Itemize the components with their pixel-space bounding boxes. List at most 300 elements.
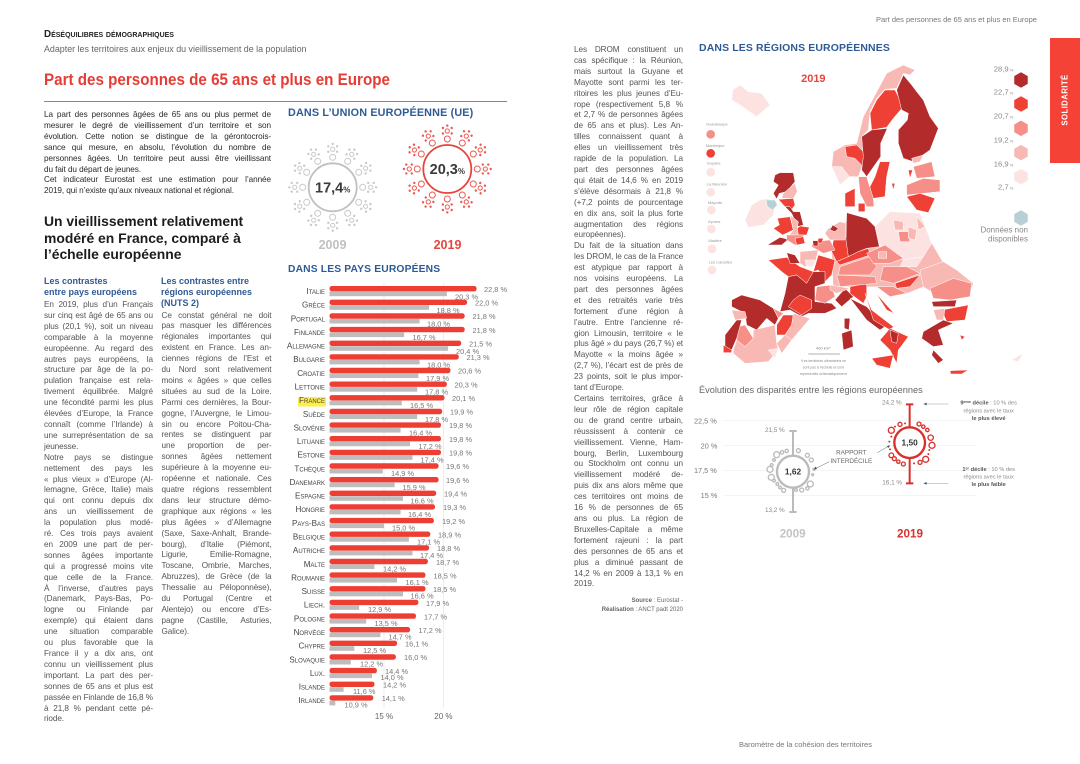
text column 1: ré. Ces trois pays avaient [44,529,153,538]
text column 1: la population plus modé- [44,518,153,527]
year 2009: 2009 [319,238,346,252]
text column 1: logne ou Finlande par [44,605,153,614]
bar chart: pays européens: Roumanie [291,573,325,582]
bar chart: pays européens: Finlande [294,328,325,337]
text column 2: moins « âgées » que celles [162,376,272,385]
text column 1: comparable à la moyenne [44,333,153,342]
bar chart: pays européens: 17,4 % [420,456,444,464]
map legend: 20,7 % [994,111,1014,120]
bar chart: pays européens: 19,9 % [450,408,473,416]
bar chart: pays européens: 19,8 % [449,448,472,458]
bar chart: pays européens: 16,5 % [410,401,433,410]
text column 1: « plus vieux » d’Europe (Al- [44,474,153,484]
text column 3: tilles connaissent quant à [574,132,683,141]
text column 3: fortement d’une région à [574,307,683,316]
intro text: du fait du départ de jeunes. [44,165,141,174]
intro text [44,110,271,195]
bar chart: pays européens: 16,1 % [406,578,429,587]
text column 3: Certains territoires, grâce à [574,394,683,403]
bar chart: pays européens: 18,8 % [436,306,460,315]
EU radial 2009 [288,143,377,232]
finland [897,75,938,163]
year labels: 2019 [897,527,923,540]
bar chart: pays européens: Suède [303,410,325,419]
text column 1: nettement des pays les [44,464,153,473]
bar chart: pays européens: Pologne [294,614,325,623]
bar chart: pays européens: 19,3 % [443,503,466,512]
united kingdom [767,173,809,245]
text column 3: nos voisins européens. La [574,274,683,283]
text column 1: lemagne, Grèce, Italie) mais [44,485,153,494]
tab: solidarité [1050,38,1080,163]
value labels [765,400,902,514]
text column 3: vieillissement modéré de- [574,470,683,479]
text column 2: rentes se distinguent par [162,430,272,439]
EU radial 2009: 17,4% [315,180,350,196]
bar chart: pays européens: Islande [299,683,325,692]
text column 2: pagne (Castille, Asturies, [162,616,272,625]
text column 1: qui a progressé moins vite [44,562,153,571]
bar chart: pays européens: Slovaquie [289,655,325,664]
bar chart: pays européens: Espagne [295,492,325,501]
intro text: Cet indicateur Eurostat est une estimation pour l’année [44,175,271,184]
overseas territories: Martinique [706,143,725,148]
bar chart: pays européens: Danemark [289,478,325,487]
source [602,598,683,613]
heading: pays européens: DANS LES PAYS EUROPÉENS [288,264,440,275]
source: Source : Eurostat - [632,598,683,604]
subheading column 2: régions européennes [161,287,252,297]
text column 2: Alentejo) ou encore d’Es- [162,605,272,614]
bar chart: pays européens: Portugal [291,314,326,323]
overseas territories: Guyane [707,160,721,165]
intro text: La part des personnes âgées de 65 ans ou plus permet de [44,110,271,119]
bar chart: pays européens: 17,2 % [418,442,442,451]
text column 1: que celle de la France. [44,573,153,582]
text column 3: Du fait de la situation dans [574,241,683,250]
chart title: Évolution des disparités entre les régions européennes [699,385,923,395]
text column 3: puis dix ans alors même que [574,481,683,490]
overseas territories: Mayotte [708,200,723,205]
text column 2: bourg), d’Italie (Piémont, [162,540,272,549]
text column 2: plus âgées » d’Allemagne [162,518,272,527]
text column 2: dans leur structure démo- [162,496,272,505]
text column 3: vieillissement. Vienne, Ham- [574,438,683,447]
bar chart: pays européens: 12,9 % [368,605,391,614]
map legend: Données non [980,226,1028,235]
bar chart: pays européens: 15 % [375,712,393,721]
text column 3: qui était de 14,6 % en 2019 [574,176,683,185]
northern ireland: no data [766,200,777,210]
text column 1: une surreprésentation de sa [44,431,153,440]
iceland [732,85,770,117]
text column 3: mais surtout la Guyane et [574,67,683,76]
subheading column 1: Les contrastes [44,276,108,286]
ireland [745,198,775,227]
map legend: 22,7 % [994,87,1014,96]
callout: rapport interdécile [814,445,890,469]
scale: *Les territoires ultramarins ne [801,359,846,363]
scale: représentés schématiquement [800,372,847,376]
text column 1: riode. [44,714,64,723]
scale: sont pas à l’échelle et sont [803,366,844,370]
text column 3: rapide de la population. La [574,154,683,163]
text column 1: À l’inverse, d’autres pays [44,584,153,593]
scale [800,346,847,376]
greece [922,320,968,374]
callout: rapport interdécile: INTERDÉCILE [830,456,872,465]
subheading column 1: entre pays européens [44,287,137,297]
grid and axis: 20 % [701,441,718,450]
overseas territories: Les Canaries [709,259,732,264]
bar chart: pays européens [287,283,507,721]
bar chart: pays européens: 17,2 % [418,626,442,635]
text column 2: graphique aux régions « les [162,507,272,516]
text column 3: ans ou plus. La région de [574,514,683,523]
text column 2: Thessalie au Péloponnèse), [162,583,272,592]
text column 3: s’élève désormais à 21,8 % [574,187,683,196]
text column 1 [44,300,154,723]
text column 3: 16 % de personnes de 65 [574,503,683,512]
text column 3: (+7,2 points de pourcentage [574,198,683,207]
bar chart: pays européens: 21,5 % [469,340,492,348]
bar chart: pays européens: Hongrie [295,505,325,514]
bar chart: pays européens: Slovénie [294,423,325,432]
text column 1: important. La part des per- [44,671,153,680]
text column 3: ritoires les plus jeunes d’Eu- [574,89,683,98]
text column 2: quatre régions ressemblent [162,485,272,494]
bar chart: pays européens: 11,6 % [353,687,376,696]
text column 1: une situation comparable [44,627,153,636]
text column 1: ans un vieillissement de [44,507,153,516]
bar chart: pays européens: 18,5 % [433,585,456,594]
heading: un vieillissement: l’échelle européenne [44,246,181,262]
text column 2: sin ou encore Poitou-Cha- [162,420,272,429]
bar chart: pays européens: 21,8 % [472,312,496,321]
map legend: 28,9 % [994,65,1014,74]
text column 3: rope (respectivement 5,8 % [574,100,683,109]
bar chart: pays européens: 15,0 % [392,524,415,532]
text column 3: ou de grand centre urbain, [574,416,683,425]
text column 3: tant d’Europe. [574,383,624,392]
bar chart: pays européens: 16,0 % [404,653,427,662]
year labels: 2009 [780,527,806,540]
bar chart: pays européens: 14,1 % [382,694,405,703]
bar chart: pays européens: Malte [304,560,325,569]
cyprus [1012,353,1023,362]
norway [832,65,915,185]
bar chart: pays européens: Bulgarie [293,355,325,364]
bar chart: pays européens: Lettonie [295,382,325,392]
map legend: 16,9 % [994,160,1014,169]
value labels: 24,2 % [882,400,902,407]
bar chart: pays européens: 17,9 % [426,599,449,608]
bar chart: pays européens: Autriche [293,546,325,555]
callout: 9e décile [923,401,1017,422]
heading: un vieillissement [44,213,243,262]
bar chart: pays européens: 16,7 % [412,333,436,342]
text column 3: bourg, Berlin, Luxembourg [574,449,683,458]
subheading column 2: (NUTS 2) [161,298,199,308]
bar chart: pays européens: 20,3 % [454,380,478,390]
text column 1: sonnes de 65 ans et plus est [44,682,153,691]
text column 1: En 2019, plus d’un Français [44,300,153,309]
text column 1: (Danemark, Pays-Bas, Po- [44,594,153,603]
running header: Part des personnes de 65 ans et plus en Europe [876,15,1037,24]
intro text: 2019, qui n’existe qu’aux niveaux national et régional. [44,186,234,195]
bar chart: pays européens: 13,5 % [374,619,398,628]
year 2019: 2019 [434,238,461,252]
intro text: mesurer le degré de vieillissement d’un territoire et son [44,121,271,130]
bar chart: pays européens: 16,4 % [409,428,432,438]
text column 2: sonnes âgées nettement [162,452,272,461]
callout: 1er décile: 1ᵉʳ décile : 10 % des [962,466,1015,473]
text column 2 [162,310,272,636]
text column 3: plus a diminué passant de [574,558,683,567]
text column 2: ciennes régions de l’Est et [162,354,272,363]
text column 1: jeunesse. [44,442,78,451]
bar chart: pays européens: 18,7 % [436,558,459,567]
text column 3: réussissent à contenir ce [574,427,683,436]
text column 3: Bruxelles-Capitale a même [574,525,683,534]
bar chart: pays européens: Lituanie [297,437,325,446]
text column 2: pas masquer les différences [162,321,272,330]
callout: 1er décile: régions avec le taux [964,474,1014,480]
bar chart: pays européens: Estonie [297,451,325,460]
text column 2: Ce constat général ne doit [162,310,272,320]
scale: 400 km* [816,346,831,351]
bar chart: pays européens: 20,3 % [455,292,478,302]
text column 3: de 65 ans et plus). Les An- [574,121,683,130]
overseas territories: Madère [708,238,723,243]
EU radial 2019 [403,124,492,214]
bar chart: pays européens: 12,2 % [360,660,383,668]
text column 3: plus âgé » du pays (26,7 %) et [574,339,683,348]
central europe [830,245,923,313]
subheading column 2: Les contrastes entre [161,276,249,286]
grid and axis: 15 % [701,491,718,500]
bar chart: pays européens: Italie [307,287,325,296]
central europe base [832,243,943,293]
bar chart: pays européens: Tchèque [294,464,325,473]
baltic states [892,162,940,213]
bar chart: pays européens: Norvège [294,628,325,637]
intro text: sance qui mesure, en absolu, l’évolution du nombre de [44,143,271,152]
bar chart: pays européens: 16,1 % [405,640,428,648]
text column 1: ou plus favorable que la [44,638,153,647]
bar chart: pays européens: 10,9 % [344,700,368,710]
text column 3: en dix ans, soit la plus forte [574,209,683,218]
text column 2: une proportion de per- [162,441,272,450]
iberian peninsula [723,295,810,363]
benelux [812,222,846,253]
callout: rapport interdécile: RAPPORT [836,449,867,456]
range 2009: 1,62 [785,467,801,477]
text column 2: Galice). [162,627,189,636]
bar chart: pays européens: 22,8 % [484,285,507,294]
bar chart: pays européens: Allemagne [287,342,325,351]
value labels: 13,2 % [765,507,785,514]
text column 3: fortement rajeuni : la part [574,536,683,545]
text column 3: part des personnes âgées [574,285,683,294]
text column 3: Les DROM constituent un [574,45,683,54]
text column 2: du Nord sont relativement [162,365,272,374]
bar chart: pays européens: 20 % [434,712,453,721]
bar chart: pays européens: 20,1 % [452,394,475,403]
bar chart: pays européens: 22,0 % [475,298,498,308]
text column 2: situées au sud de la Loire. [162,387,272,396]
text column 3: 2019. [574,579,594,588]
range 2009 [767,431,815,512]
text column 2: supérieure à la moyenne eu- [162,463,272,472]
bar chart: pays européens: 19,6 % [446,476,469,485]
bar chart: pays européens: 18,5 % [434,572,457,580]
bar chart: pays européens: 14,4 % [385,667,408,676]
text column 1: élevées d’Europe, la France [44,409,153,418]
heading: un vieillissement: Un vieillissement relativement [44,213,243,229]
intro text: personnes âgées. Un territoire peut aussi être vieillissant [44,154,271,163]
year labels [780,527,923,540]
tab: solidarité: SOLIDARITÉ [1060,74,1070,126]
text column 1: autres pays européens, la [44,355,153,364]
text column 1: plus (20,1 %), soit un niveau [44,322,153,331]
overseas territories: La Réunion [707,181,727,186]
bar chart: pays européens: 19,4 % [444,490,467,498]
text column 1: en 2009 une part de per- [44,540,153,549]
bar chart: pays européens: 19,8 % [449,421,472,430]
bar chart: pays européens: 18,0 % [427,320,450,328]
text column 1: France il y a dix ans, ont [44,649,153,658]
text column 3: leur rôle de région capitale [574,405,683,414]
sweden [858,90,903,207]
poland [875,212,932,260]
callout: 1er décile: le plus faible [972,482,1006,488]
bar chart: pays européens: 14,0 % [380,673,404,682]
text column 1: sonnes âgées importante [44,551,153,560]
bar chart: pays européens: Suisse [302,587,325,596]
overseas territories [706,122,745,274]
value labels: 16,1 % [882,480,902,487]
bar chart: pays européens: Belgique [293,532,325,542]
bar chart: pays européens: 21,8 % [472,326,496,335]
subheading column 2 [161,276,252,308]
text column 2: Abruzzes), de Grèce (de la [162,572,272,581]
bar chart: pays européens: 19,2 % [442,517,465,526]
text column 1: qui ont connu depuis dix [44,496,153,505]
bar chart: pays européens: Pays-Bas [292,519,325,528]
value labels: 21,5 % [765,427,785,434]
bar chart: pays européens: 16,6 % [410,496,434,506]
text column 3: 14,2 % en 2009 à 13,1 % en [574,568,683,578]
text column 2: régionales importantes qui [162,332,272,341]
bar chart: pays européens: 16,4 % [408,510,431,519]
text column 3: 23 points, soit le plus impor- [574,372,683,381]
text column 2: Parmi ces dernières, la Bour- [162,398,272,407]
callout: 9e décile: le plus élevé [972,416,1005,422]
france [768,250,837,317]
text column 2: Ligurie, Emilie-Romagne, [162,550,272,559]
text column 3: Mayotte sont parmi les ter- [574,78,683,87]
map legend [980,65,1028,244]
text column 3: elles un vieillissement très [574,143,683,152]
bar chart: pays européens: 17,7 % [424,612,447,622]
bar chart: pays européens: Chypre [298,642,325,651]
bar chart: pays européens: 14,9 % [391,469,414,478]
bar chart: pays européens: 20,6 % [458,366,481,376]
text column 3 [574,45,684,588]
text column 1: une fécondité parmi les plus [44,398,153,407]
overseas territories: Guadeloupe [706,122,728,127]
text column 2: du Portugal (Centre et [162,594,272,603]
bar chart: pays européens: Croatie [297,369,325,378]
bar chart: pays européens: 19,8 % [449,435,472,444]
text column 2: gogne, l’Auvergne, le Limou- [162,409,272,418]
range 2019 [888,404,935,483]
text column 1: à 21,8 % pendant cette pé- [44,704,153,713]
text column 3: et des retraités varie très [574,296,683,305]
text column 3: part des personnes âgées [574,165,683,174]
text column 1: tivement équilibrée. Malgré [44,387,153,396]
bar chart: pays européens: 16,6 % [410,592,434,600]
italy [835,283,908,368]
text column 3: Mayotte « la moins âgée » [574,350,683,359]
bar chart: pays européens: 17,9 % [426,374,449,383]
bar chart: pays européens: 20,4 % [456,347,479,356]
heading: un vieillissement: modéré en France, comparé à [44,230,241,246]
bar chart: pays européens: 17,4 % [420,551,443,560]
grid and axis [694,416,977,500]
text column 2: (Saxe, Saxe-Anhalt, Brande- [162,529,272,538]
heading: régions européennes: DANS LES RÉGIONS EUROPÉENNES [699,43,890,54]
grid and axis: 22,5 % [694,416,717,425]
map year: 2019 [801,73,826,85]
text column 3: cas spécifique : la Réunion, [574,56,683,65]
text column 2: Toscane, Ombrie, Marches, [162,561,272,570]
text column 1: passée en Finlande de 16,8 % [44,693,153,702]
map: régions européennes [706,65,1028,376]
heading: union européenne: DANS L’UNION EUROPÉENNE (UE) [288,107,473,119]
romania and bulgaria [920,262,973,322]
bar chart: pays européens: 14,2 % [383,680,406,690]
bar chart: pays européens: 12,5 % [363,646,386,655]
section label: Déséquilibres démographiques [44,29,174,40]
text column 3: (2,7 %), l’écart est de près de [574,361,683,370]
map legend: disponibles [988,235,1028,244]
text column 3: l’autre. Entre l’ancienne ré- [574,318,683,327]
text column 1: structure par âge de la po- [44,365,153,374]
text column 3: les DROM, le cas de la France [574,252,683,261]
bar chart: pays européens: Grèce [302,301,325,310]
subheading column 1 [44,276,137,297]
bar chart: pays européens: 15,9 % [402,483,426,492]
range 2019: 1,50 [902,438,918,448]
bar chart: pays européens: 21,3 % [466,353,490,362]
text column 3: est atypique par rapport à [574,263,683,272]
bar chart: pays européens: Liech. [304,601,325,610]
title: Part des personnes de 65 ans et plus en Europe [44,70,390,89]
text column 3: ou Stockholm ont connu un [574,459,683,468]
text column 3: européennes). [574,230,626,239]
text column 1: sur cinq est âgé de 65 ans ou [44,311,153,320]
bar chart: pays européens: 17,1 % [417,538,440,546]
text column 2: ropéenne et nationale. Ces [162,474,272,483]
text column 1: connu un vieillissement plus [44,660,153,669]
text column 1: exemple) qui étaient dans [44,616,153,625]
bar chart: pays européens: 18,8 % [437,544,460,553]
text column 3: et 2,7 % de personnes âgées [574,110,683,119]
bar chart: pays européens: Lux. [310,669,325,678]
callout: 1er décile [923,466,1015,488]
